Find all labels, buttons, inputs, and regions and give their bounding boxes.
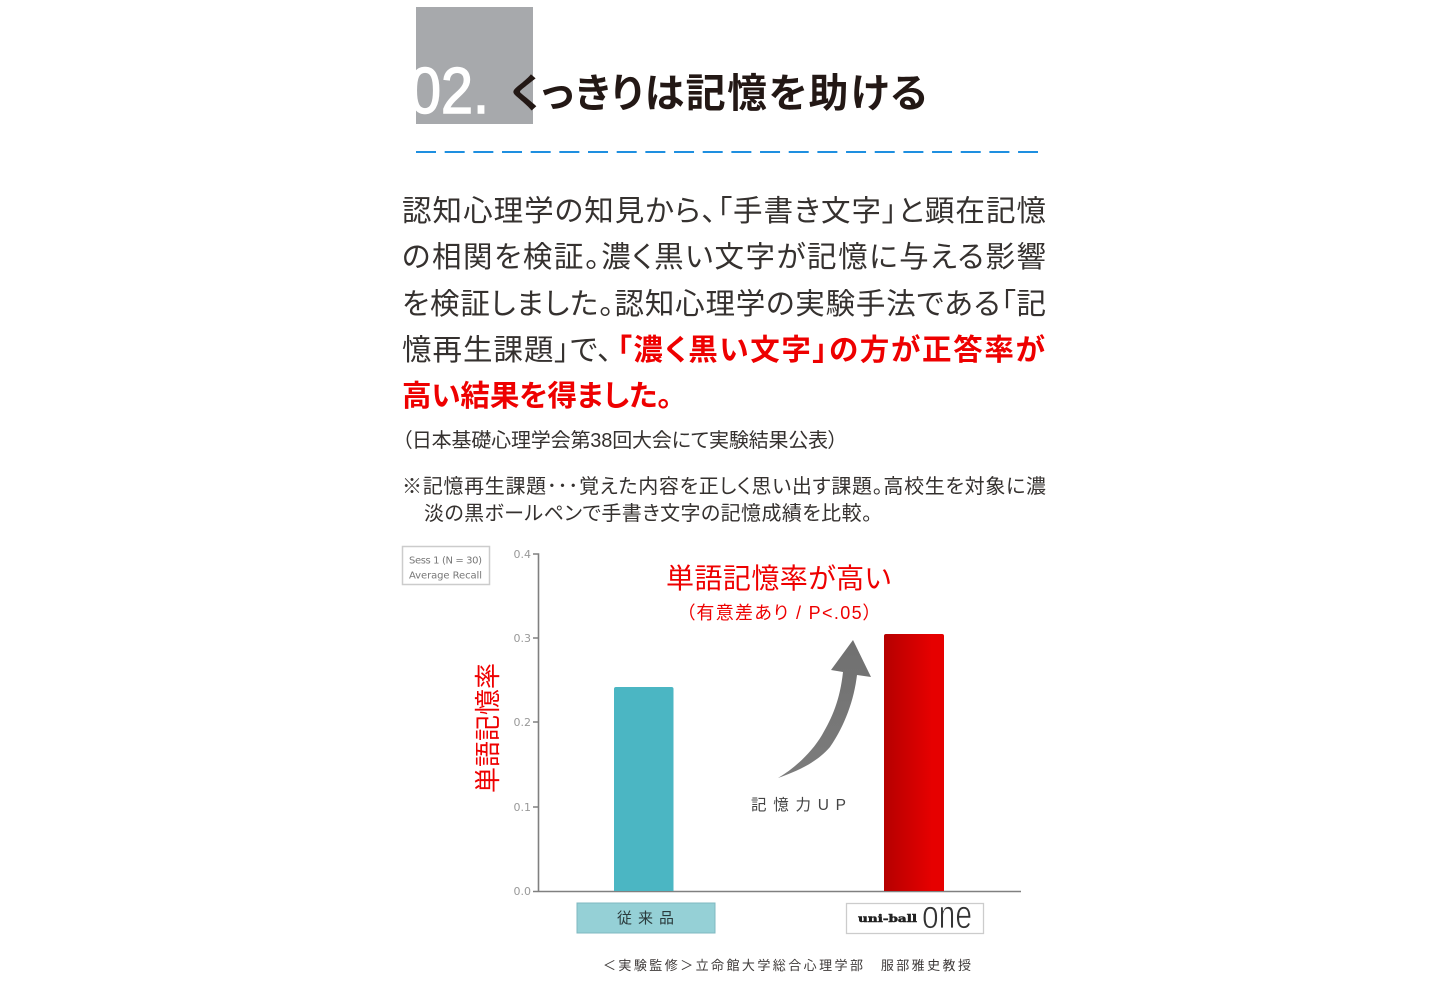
body paragraph [402, 195, 1046, 413]
y axis label: 単語記憶率 [473, 663, 503, 793]
axes: 0.0 [514, 885, 531, 898]
arrow [778, 640, 871, 778]
label: uni-ball one: uni-ball [858, 914, 917, 925]
callout [666, 563, 891, 623]
body paragraph: 高い結果を得ました。 [402, 380, 672, 413]
bar: conventional [614, 687, 674, 891]
number badge [409, 7, 533, 127]
footnote: 淡の黒ボールペンで手書き文字の記憶成績を比較。 [424, 502, 872, 525]
section heading [409, 7, 927, 127]
title: くっきりは記憶を助ける [510, 72, 927, 116]
credit: ＜実験監修＞立命館大学総合心理学部 服部雅史教授 [603, 958, 971, 973]
body paragraph: 憶再生課題」で、 [402, 334, 612, 367]
callout: （有意差あり / P<.05） [686, 603, 872, 623]
legend box: Average Recall [409, 570, 482, 582]
axes [514, 548, 1021, 898]
bar chart [402, 546, 1021, 937]
body paragraph: を検証しました。認知心理学の実験手法である「記 [402, 288, 1046, 321]
axes: 0.2 [514, 716, 531, 729]
axes: 0.3 [514, 632, 531, 645]
callout: 単語記憶率が高い [666, 563, 891, 594]
legend box: Sess 1 (N = 30) [409, 556, 482, 566]
body paragraph: 認知心理学の知見から、「手書き文字」と顕在記憶 [402, 195, 1046, 228]
body paragraph: 「濃く黒い文字」の方が正答率が [617, 333, 1045, 367]
label: uni-ball one: one [922, 893, 972, 937]
label: conventional: 従来品 [617, 910, 674, 927]
axes: 0.1 [514, 801, 531, 814]
label: conventional [577, 903, 715, 933]
citation: （日本基礎心理学会第38回大会にて実験結果公表） [402, 429, 838, 452]
body paragraph: の相関を検証。濃く黒い文字が記憶に与える影響 [402, 241, 1046, 274]
label: uni-ball one [846, 893, 984, 937]
arrow label: 記憶力UP [751, 796, 846, 814]
legend box [402, 546, 490, 584]
number badge: 02. [409, 54, 489, 127]
footnote [402, 475, 1046, 525]
bar: uni-ball one [884, 634, 944, 891]
footnote: ※記憶再生課題･･･覚えた内容を正しく思い出す課題。高校生を対象に濃 [402, 475, 1046, 498]
axes: 0.4 [514, 548, 531, 561]
